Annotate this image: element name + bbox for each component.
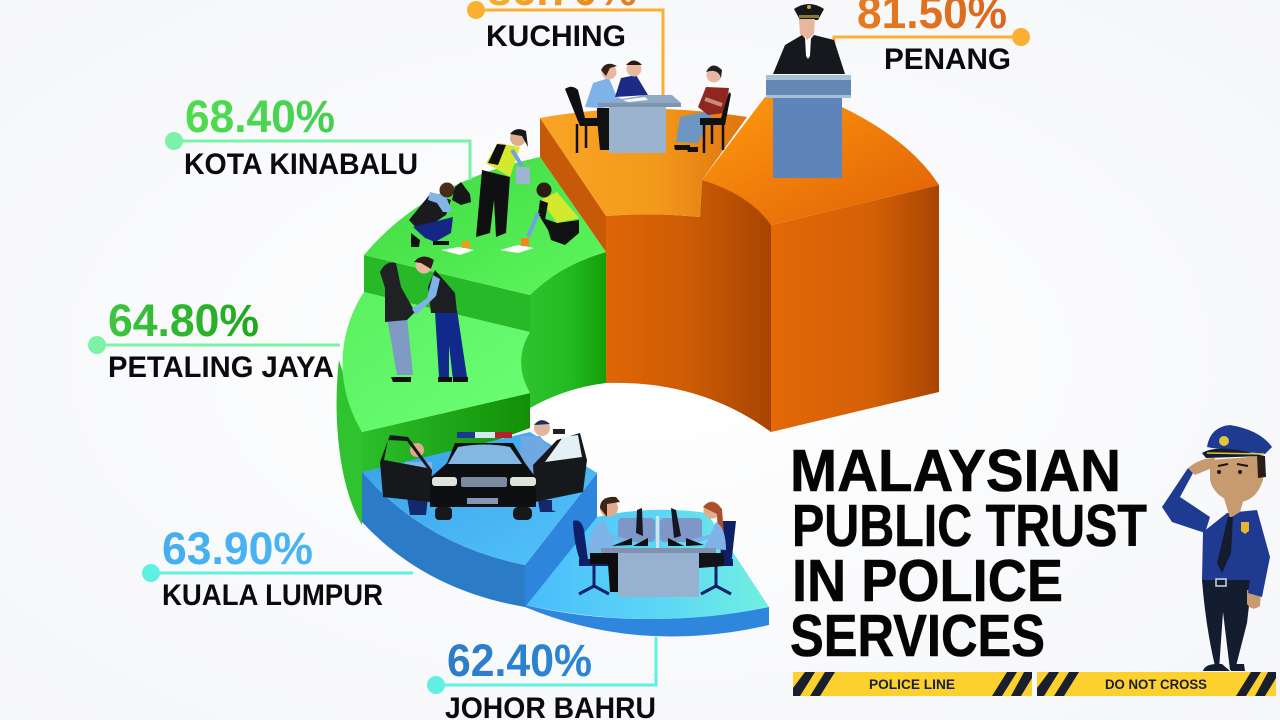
title: SERVICES	[790, 603, 1045, 669]
suspect	[387, 317, 413, 375]
3D stepped pie chart	[337, 97, 939, 637]
desk	[601, 548, 716, 553]
monitors	[636, 508, 681, 538]
police tape	[793, 672, 1276, 696]
doors	[380, 435, 432, 502]
partitions	[618, 518, 655, 542]
chair left	[565, 87, 606, 126]
photographer	[409, 193, 451, 232]
icon: call centre desk	[573, 497, 736, 597]
slice: Kota Kinabalu	[364, 157, 606, 408]
label: Penang: PENANG	[884, 43, 1011, 76]
cap	[1207, 425, 1272, 454]
badge	[1241, 522, 1249, 534]
chairs	[573, 520, 588, 560]
label: Kuching	[467, 0, 663, 97]
slice: Petaling Jaya	[337, 292, 530, 525]
icon: saluting officer	[1162, 425, 1272, 671]
title: PUBLIC TRUST	[792, 493, 1147, 559]
label: Kota Kinabalu	[165, 91, 470, 181]
officer light blue	[597, 108, 612, 150]
evidence markers	[441, 245, 534, 255]
legs	[1202, 580, 1252, 670]
title: MALAYSIAN	[790, 438, 1121, 504]
icon: arrest scene	[380, 256, 468, 382]
table	[598, 95, 681, 103]
slice: Johor Bahru	[525, 510, 769, 637]
slice: Kuala Lumpur	[362, 432, 597, 607]
torso	[1202, 510, 1270, 597]
icon: officer at podium	[766, 4, 851, 178]
car body	[430, 443, 536, 507]
label: Kota Kinabalu: KOTA KINABALU	[184, 148, 418, 181]
label: Johor Bahru: 62.40%	[447, 635, 592, 686]
officer	[435, 310, 467, 380]
suspect	[410, 443, 424, 457]
officer navy	[615, 75, 648, 97]
label: Penang	[834, 0, 1030, 76]
hand right	[1247, 590, 1261, 609]
tape: do not cross	[1037, 672, 1276, 696]
tape: police line	[793, 672, 1032, 696]
label: Johor Bahru	[427, 635, 656, 720]
label: Kuching: KUCHING	[486, 20, 626, 53]
man in red	[676, 110, 715, 143]
label: Petaling Jaya: 64.80%	[108, 295, 259, 346]
label: Kuala Lumpur	[142, 523, 413, 612]
officer behind door	[534, 420, 550, 436]
arm	[1162, 468, 1210, 533]
lightbar	[457, 432, 475, 438]
label: Petaling Jaya	[88, 295, 340, 384]
tape: do not cross: DO NOT CROSS	[1105, 677, 1207, 692]
label: Petaling Jaya: PETALING JAYA	[108, 351, 334, 384]
title: IN POLICE	[792, 548, 1063, 614]
chair right	[700, 92, 731, 125]
neck and tie	[1223, 495, 1245, 518]
keyboards	[612, 538, 704, 546]
head	[1210, 456, 1263, 502]
slice: Kuching	[540, 109, 747, 252]
slice: Penang	[606, 97, 939, 432]
operators	[600, 499, 618, 517]
hand	[1188, 458, 1215, 475]
tape: police line: POLICE LINE	[869, 677, 955, 692]
icon: police car scene	[380, 420, 587, 520]
label: Kota Kinabalu: 68.40%	[185, 91, 335, 142]
title	[790, 438, 1147, 669]
icon: crime scene team	[409, 129, 579, 255]
icon: interview table scene	[565, 60, 731, 153]
standing officer	[476, 170, 510, 237]
label: Kuala Lumpur: KUALA LUMPUR	[162, 579, 383, 612]
label: Kuala Lumpur: 63.90%	[162, 523, 313, 574]
kneeling officer with vest	[540, 217, 579, 245]
